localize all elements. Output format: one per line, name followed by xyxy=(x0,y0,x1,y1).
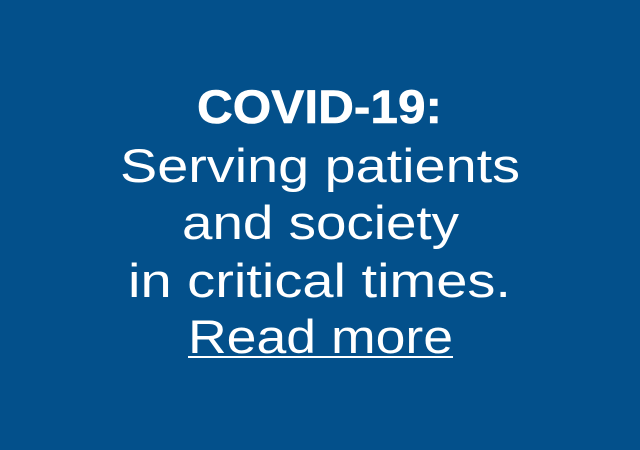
link: Read more: Read more xyxy=(188,310,453,363)
text line: in critical times.: in critical times. xyxy=(128,254,511,307)
heading: COVID-19: xyxy=(197,80,442,133)
text line: Serving patients: Serving patients xyxy=(120,139,520,192)
text line: and society: and society xyxy=(182,196,460,249)
